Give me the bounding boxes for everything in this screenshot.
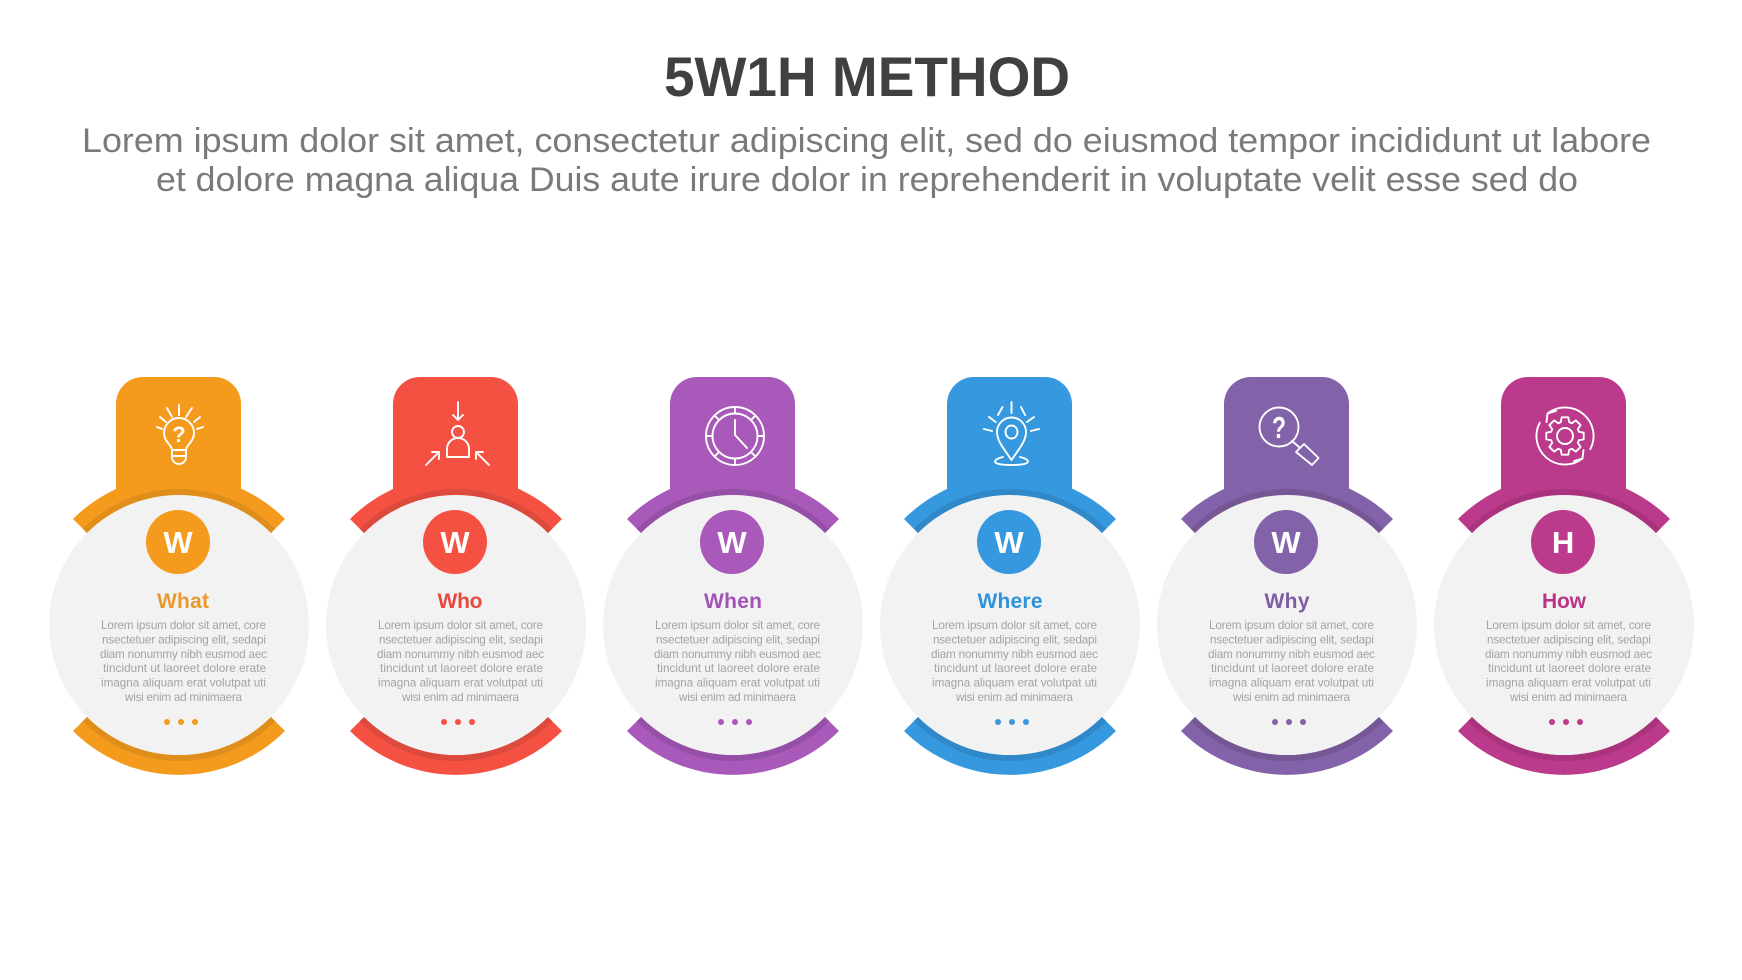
description: imagna aliquam erat volutpat uti: [655, 677, 820, 690]
description: nsectetuer adipiscing elit, sedapi: [933, 633, 1097, 646]
description: imagna aliquam erat volutpat uti: [932, 677, 1097, 690]
top arc: [904, 475, 1116, 533]
dots: [1549, 719, 1583, 725]
panel: Where: [880, 377, 1140, 775]
description: nsectetuer adipiscing elit, sedapi: [102, 633, 266, 646]
bottom arc: [1458, 717, 1670, 775]
description: [100, 619, 267, 704]
bottom arc: [73, 717, 285, 775]
icon: magnifier with question mark: ?: [1272, 410, 1286, 445]
description: diam nonummy nibh eusmod aec: [100, 648, 267, 661]
circle background: [880, 495, 1140, 755]
icon: person with arrows: [426, 402, 489, 465]
letter badge: [977, 510, 1041, 574]
description: [654, 619, 821, 704]
heading: What: What: [157, 590, 209, 613]
subtitle: [82, 122, 1651, 199]
letter badge: W: [717, 525, 747, 560]
description: wisi enim ad minimaera: [678, 691, 796, 704]
description: wisi enim ad minimaera: [955, 691, 1073, 704]
top arc: [1458, 475, 1670, 533]
panel: Why: [1157, 377, 1417, 775]
heading: Where: Where: [978, 590, 1042, 613]
heading: How: How: [1542, 590, 1587, 613]
description: diam nonummy nibh eusmod aec: [931, 648, 1098, 661]
icon: light bulb with question mark: [157, 405, 203, 464]
description: Lorem ipsum dolor sit amet, core: [378, 619, 543, 632]
description: tincidunt ut laoreet dolore erate: [103, 662, 266, 675]
letter badge: H: [1552, 525, 1574, 560]
description: tincidunt ut laoreet dolore erate: [1488, 662, 1651, 675]
panel: Who: [326, 377, 586, 775]
panel: How: [1434, 377, 1694, 775]
description: diam nonummy nibh eusmod aec: [654, 648, 821, 661]
circle background: [326, 495, 586, 755]
icon: light bulb with question mark: ?: [172, 422, 186, 447]
description: imagna aliquam erat volutpat uti: [1209, 677, 1374, 690]
circle background: [49, 495, 309, 755]
description: nsectetuer adipiscing elit, sedapi: [1210, 633, 1374, 646]
panel: When: [603, 377, 863, 775]
heading: Who: Who: [438, 590, 482, 613]
description: nsectetuer adipiscing elit, sedapi: [1487, 633, 1651, 646]
description: tincidunt ut laoreet dolore erate: [657, 662, 820, 675]
dots: [718, 719, 752, 725]
description: Lorem ipsum dolor sit amet, core: [1486, 619, 1651, 632]
dots: [164, 719, 198, 725]
top arc: [350, 475, 562, 533]
dots: [441, 719, 475, 725]
description: Lorem ipsum dolor sit amet, core: [932, 619, 1097, 632]
circle background: [603, 495, 863, 755]
top arc: [627, 475, 839, 533]
icon: gear with cycle arrows: [1536, 407, 1594, 465]
description: [931, 619, 1098, 704]
letter badge: W: [163, 525, 193, 560]
top tab: [393, 377, 518, 500]
letter badge: W: [440, 525, 470, 560]
icon: clock: [706, 407, 764, 465]
description: diam nonummy nibh eusmod aec: [1208, 648, 1375, 661]
subtitle: et dolore magna aliqua Duis aute irure dolor in reprehenderit in voluptate velit esse sed do: [156, 161, 1578, 199]
description: Lorem ipsum dolor sit amet, core: [1209, 619, 1374, 632]
subtitle: Lorem ipsum dolor sit amet, consectetur adipiscing elit, sed do eiusmod tempor incididunt ut labore: [82, 122, 1651, 160]
description: imagna aliquam erat volutpat uti: [101, 677, 266, 690]
description: imagna aliquam erat volutpat uti: [1486, 677, 1651, 690]
heading: When: When: [704, 590, 762, 613]
description: wisi enim ad minimaera: [1509, 691, 1627, 704]
circle background: [1434, 495, 1694, 755]
circle background: [1157, 495, 1417, 755]
bottom arc: [350, 717, 562, 775]
top tab: [1224, 377, 1349, 500]
letter badge: W: [994, 525, 1024, 560]
dots: [995, 719, 1029, 725]
top tab: [116, 377, 241, 500]
top arc: [73, 475, 285, 533]
bottom arc: [627, 717, 839, 775]
description: [1485, 619, 1652, 704]
description: tincidunt ut laoreet dolore erate: [1211, 662, 1374, 675]
description: wisi enim ad minimaera: [401, 691, 519, 704]
title: 5W1H METHOD: [664, 45, 1070, 108]
description: nsectetuer adipiscing elit, sedapi: [656, 633, 820, 646]
letter badge: W: [1271, 525, 1301, 560]
top tab: [947, 377, 1072, 500]
icon: magnifier with question mark: [1260, 408, 1319, 465]
top arc: [1181, 475, 1393, 533]
icon: location pin with rays: [984, 402, 1039, 465]
description: Lorem ipsum dolor sit amet, core: [101, 619, 266, 632]
dots: [1272, 719, 1306, 725]
top tab: [1501, 377, 1626, 500]
description: imagna aliquam erat volutpat uti: [378, 677, 543, 690]
letter badge: [1531, 510, 1595, 574]
letter badge: [146, 510, 210, 574]
description: Lorem ipsum dolor sit amet, core: [655, 619, 820, 632]
bottom arc: [1181, 717, 1393, 775]
description: nsectetuer adipiscing elit, sedapi: [379, 633, 543, 646]
panel: What: [49, 377, 309, 775]
description: wisi enim ad minimaera: [1232, 691, 1350, 704]
description: diam nonummy nibh eusmod aec: [377, 648, 544, 661]
letter badge: [700, 510, 764, 574]
bottom arc: [904, 717, 1116, 775]
letter badge: [423, 510, 487, 574]
description: wisi enim ad minimaera: [124, 691, 242, 704]
description: diam nonummy nibh eusmod aec: [1485, 648, 1652, 661]
description: tincidunt ut laoreet dolore erate: [934, 662, 1097, 675]
description: tincidunt ut laoreet dolore erate: [380, 662, 543, 675]
description: [377, 619, 544, 704]
letter badge: [1254, 510, 1318, 574]
description: [1208, 619, 1375, 704]
heading: Why: Why: [1264, 590, 1310, 613]
top tab: [670, 377, 795, 500]
